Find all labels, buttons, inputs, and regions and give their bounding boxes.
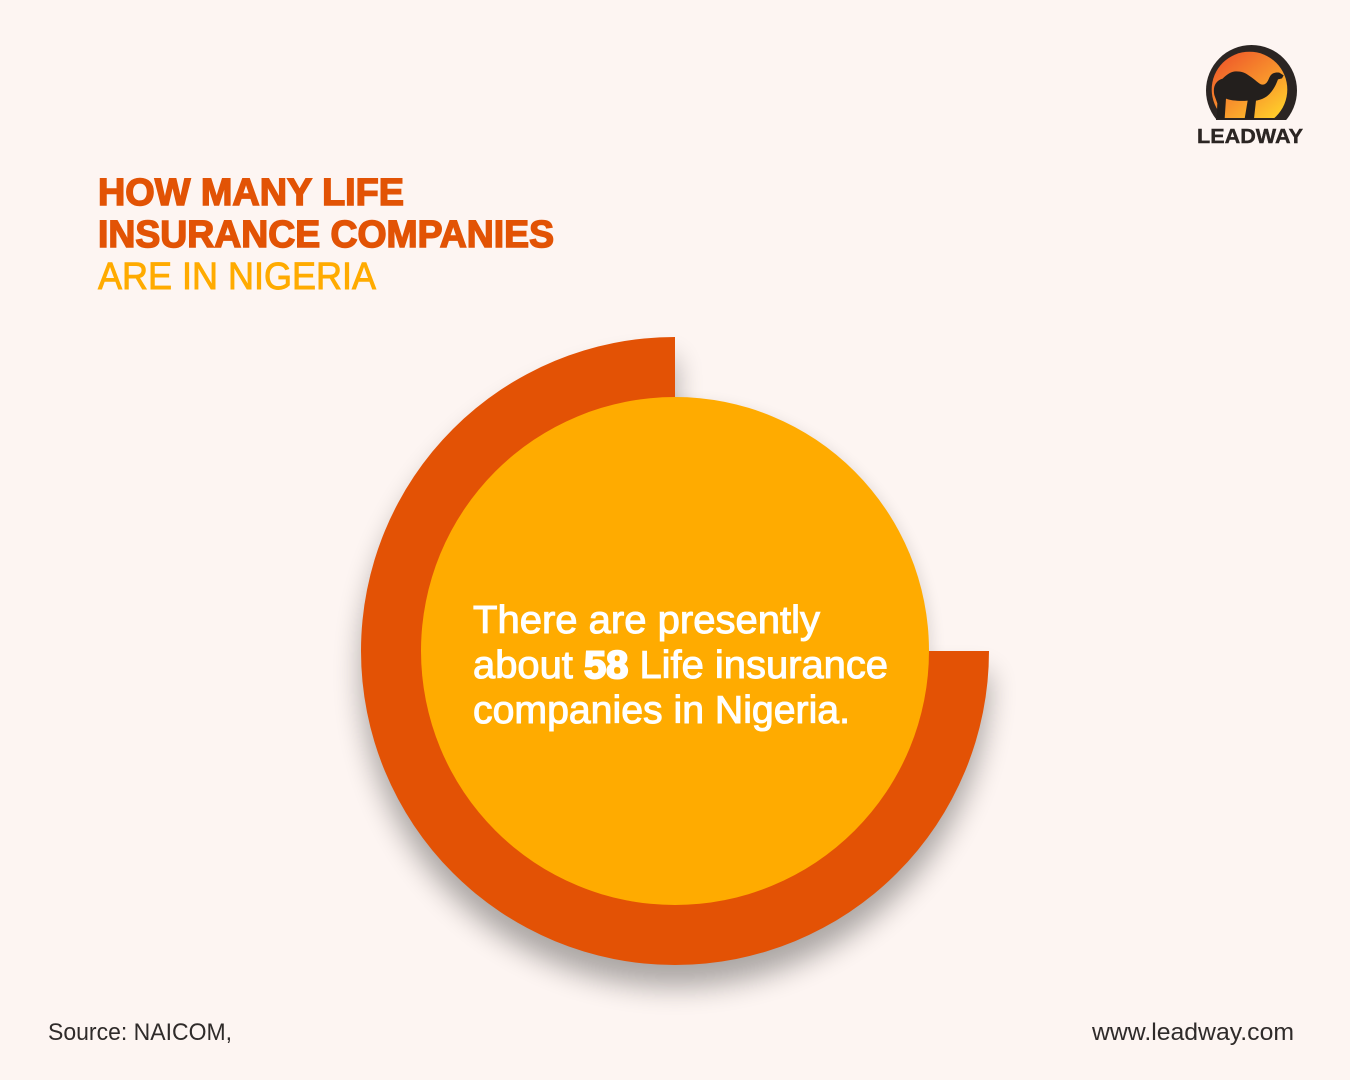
logo: Leadway camel xyxy=(1197,45,1304,148)
title: INSURANCE COMPANIES xyxy=(98,214,554,256)
ring: three-quarter orange arc xyxy=(361,337,989,965)
title: HOW MANY LIFE xyxy=(98,172,404,214)
centre text xyxy=(473,599,888,732)
source note: Source: NAICOM, xyxy=(48,1019,232,1046)
centre text: There are presently xyxy=(473,599,821,642)
title xyxy=(98,172,554,298)
centre text: about 58 Life insurance xyxy=(473,644,888,687)
centre text: companies in Nigeria. xyxy=(473,689,850,732)
logo: Leadway camel: LEADWAY xyxy=(1197,126,1304,148)
chart: circular ring with centre circle xyxy=(361,337,989,987)
inner circle xyxy=(421,397,929,905)
website: www.leadway.com xyxy=(1091,1019,1294,1046)
icon: camel silhouette xyxy=(1214,71,1284,119)
title: ARE IN NIGERIA xyxy=(98,256,377,298)
